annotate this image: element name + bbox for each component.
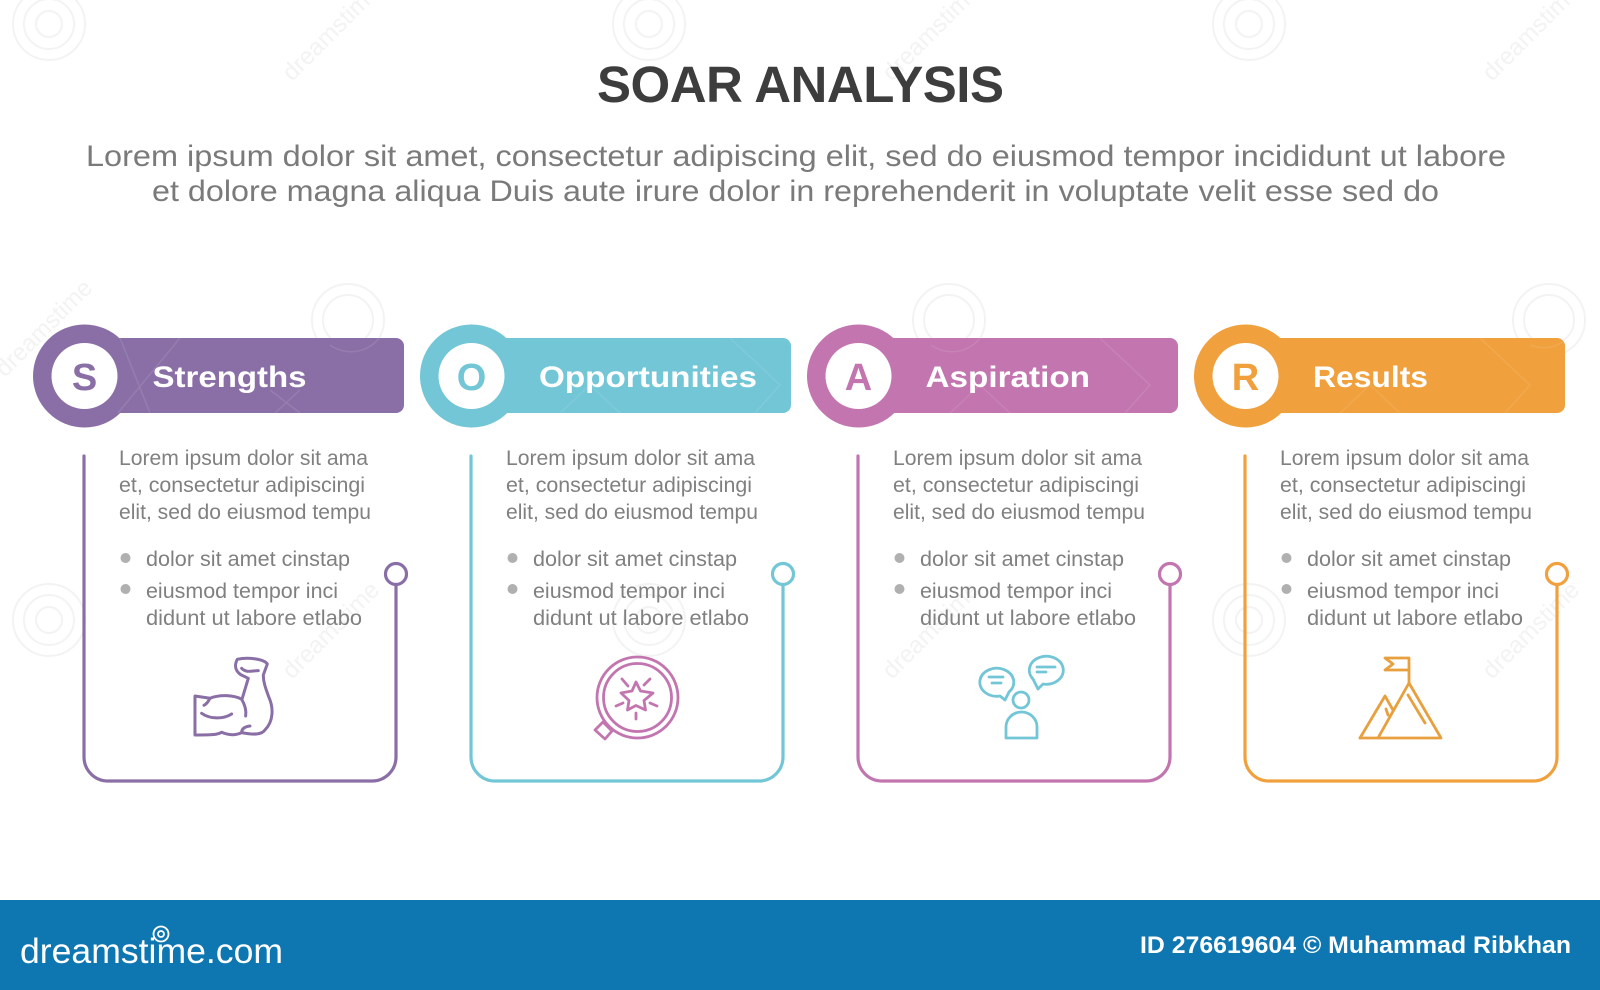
bullet list: aspiration: didunt ut labore etlabo <box>920 607 1136 630</box>
panel: results <box>1194 324 1568 781</box>
bullet list: strengths: eiusmod tempor inci <box>146 580 338 603</box>
description: opportunities: et, consectetur adipiscingi <box>506 474 752 497</box>
description: results: Lorem ipsum dolor sit ama <box>1280 447 1529 470</box>
logo spiral <box>154 926 168 942</box>
bullet list: opportunities: eiusmod tempor inci <box>533 580 725 603</box>
bullet list: strengths: didunt ut labore etlabo <box>146 607 362 630</box>
description: opportunities <box>506 447 758 524</box>
subtitle text: et dolore magna aliqua Duis aute irure dolor in reprehenderit in voluptate velit esse sed do <box>152 175 1439 208</box>
image credit: ID 276619604 © Muhammad Ribkhan <box>1140 932 1571 959</box>
header banner: results: R <box>1232 357 1259 399</box>
bullet list: results: eiusmod tempor inci <box>1307 580 1499 603</box>
icon: star badge <box>595 657 678 739</box>
header banner: aspiration <box>807 324 1178 428</box>
header banner: results <box>1194 324 1565 428</box>
description: aspiration: elit, sed do eiusmod tempu <box>893 501 1145 524</box>
subtitle text: Lorem ipsum dolor sit amet, consectetur adipiscing elit, sed do eiusmod tempor incididunt ut labore <box>86 140 1506 173</box>
outline frame: aspiration <box>858 456 1170 781</box>
icon: person with speech bubbles <box>980 656 1063 738</box>
header banner: opportunities: O <box>457 357 486 399</box>
icon: flexed arm <box>195 658 272 735</box>
description: aspiration: Lorem ipsum dolor sit ama <box>893 447 1142 470</box>
outline frame: results <box>1245 456 1557 781</box>
bullet list: results <box>1282 548 1523 630</box>
panel: aspiration <box>807 324 1180 781</box>
bullet list: aspiration <box>894 548 1136 630</box>
description: results: et, consectetur adipiscingi <box>1280 474 1526 497</box>
bullet list: opportunities: didunt ut labore etlabo <box>533 607 749 630</box>
bullet list: aspiration: eiusmod tempor inci <box>920 580 1112 603</box>
bullet list: results: didunt ut labore etlabo <box>1307 607 1523 630</box>
header banner: aspiration: Aspiration <box>926 361 1090 394</box>
description: results <box>1280 447 1532 524</box>
text: dreamstime <box>1477 576 1585 684</box>
bullet list: strengths <box>120 548 362 630</box>
bullet list: strengths: dolor sit amet cinstap <box>146 548 350 571</box>
connector ring: strengths <box>386 564 406 584</box>
connector ring: results <box>1546 564 1568 584</box>
description: strengths: elit, sed do eiusmod tempu <box>119 501 371 524</box>
header banner: strengths <box>33 324 404 428</box>
bullet list: results: dolor sit amet cinstap <box>1307 548 1511 571</box>
description: aspiration <box>893 447 1145 524</box>
outline frame: opportunities <box>471 456 783 781</box>
header banner: strengths: Strengths <box>152 361 306 394</box>
header banner: aspiration: A <box>845 357 872 399</box>
icon: mountain with flag <box>1360 658 1441 738</box>
connector ring: aspiration <box>1160 564 1180 584</box>
bullet list: opportunities: dolor sit amet cinstap <box>533 548 737 571</box>
outline frame: strengths <box>84 456 396 781</box>
description: opportunities: Lorem ipsum dolor sit ama <box>506 447 755 470</box>
description: opportunities: elit, sed do eiusmod tempu <box>506 501 758 524</box>
description: results: elit, sed do eiusmod tempu <box>1280 501 1532 524</box>
header banner: strengths: S <box>72 357 97 399</box>
description: strengths: et, consectetur adipiscingi <box>119 474 365 497</box>
connector ring: opportunities <box>772 564 794 584</box>
header banner: opportunities <box>420 324 791 428</box>
header banner: results: Results <box>1313 361 1428 394</box>
description: strengths: Lorem ipsum dolor sit ama <box>119 447 368 470</box>
header banner: opportunities: Opportunities <box>539 361 757 394</box>
description: aspiration: et, consectetur adipiscingi <box>893 474 1139 497</box>
footer bar <box>0 900 1600 990</box>
text: dreamstime <box>877 576 985 684</box>
bullet list: opportunities <box>508 548 749 630</box>
panel: opportunities <box>420 324 794 781</box>
bullet list: aspiration: dolor sit amet cinstap <box>920 548 1124 571</box>
title: SOAR ANALYSIS <box>597 56 1004 113</box>
logo wordmark: dreamstime.com <box>20 932 283 971</box>
text: dreamstime <box>277 576 385 684</box>
subtitle text <box>86 140 1506 208</box>
description: strengths <box>119 447 371 524</box>
panel: strengths <box>33 324 406 781</box>
